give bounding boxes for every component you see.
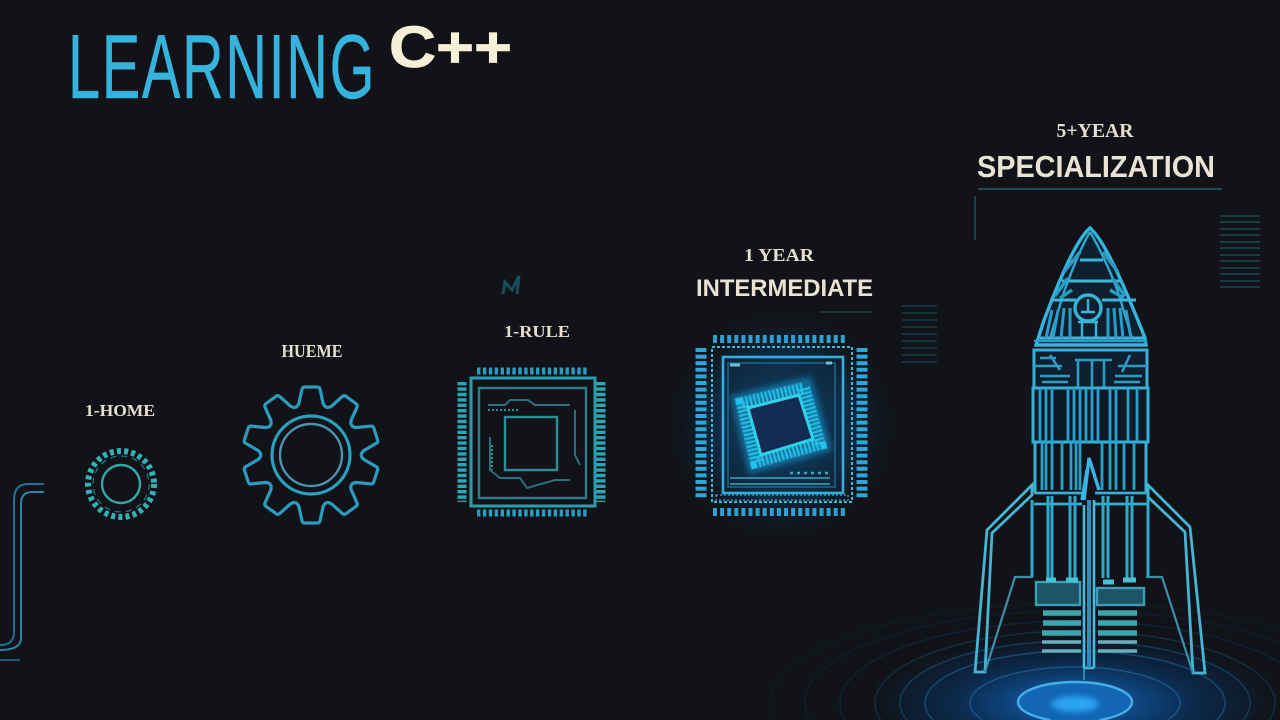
- icon: large gear: [242, 387, 380, 523]
- stage 4 duration label: 1 YEAR: [744, 245, 815, 265]
- connector pipe: [0, 484, 44, 660]
- stage 1 label: 1-HOME: [85, 401, 155, 420]
- stage 5 heading: SPECIALIZATION: [977, 149, 1215, 184]
- stage 2: label and large gear: [242, 341, 380, 523]
- rocket upper body: [1033, 388, 1148, 442]
- icon: small gear: [88, 451, 154, 517]
- rocket struts: [1032, 490, 1148, 578]
- rocket: [975, 228, 1205, 680]
- right fin: [1146, 485, 1205, 673]
- stage 4 heading: INTERMEDIATE: [696, 275, 873, 302]
- processor core: [742, 388, 820, 462]
- icon: glowing processor: [667, 307, 897, 543]
- rocket lower body: [1035, 442, 1146, 492]
- stage 2 label: HUEME: [282, 341, 342, 361]
- faint mark above label: [503, 276, 519, 294]
- pad glow core: [1018, 682, 1132, 720]
- icon: circuit chip: [462, 371, 601, 513]
- stage 3: label and chip: [462, 276, 601, 513]
- stage 3 label: 1-RULE: [504, 322, 570, 341]
- title: [68, 15, 512, 118]
- rocket engines: [1036, 580, 1144, 651]
- left fin: [975, 485, 1033, 672]
- title word: LEARNING: LEARNING: [68, 17, 376, 118]
- title word: C++: C++: [389, 15, 512, 80]
- stage 4: label and glowing chip: [667, 245, 897, 543]
- launch pad with rings: [770, 603, 1280, 720]
- rocket nose: [1036, 228, 1146, 345]
- stage 5 duration label: 5+YEAR: [1056, 120, 1134, 142]
- rocket centre spine: [1082, 458, 1099, 680]
- rocket equipment bay: [1034, 341, 1147, 388]
- stage 1: label and small gear: [85, 401, 155, 517]
- stage 5: label block: [977, 120, 1215, 184]
